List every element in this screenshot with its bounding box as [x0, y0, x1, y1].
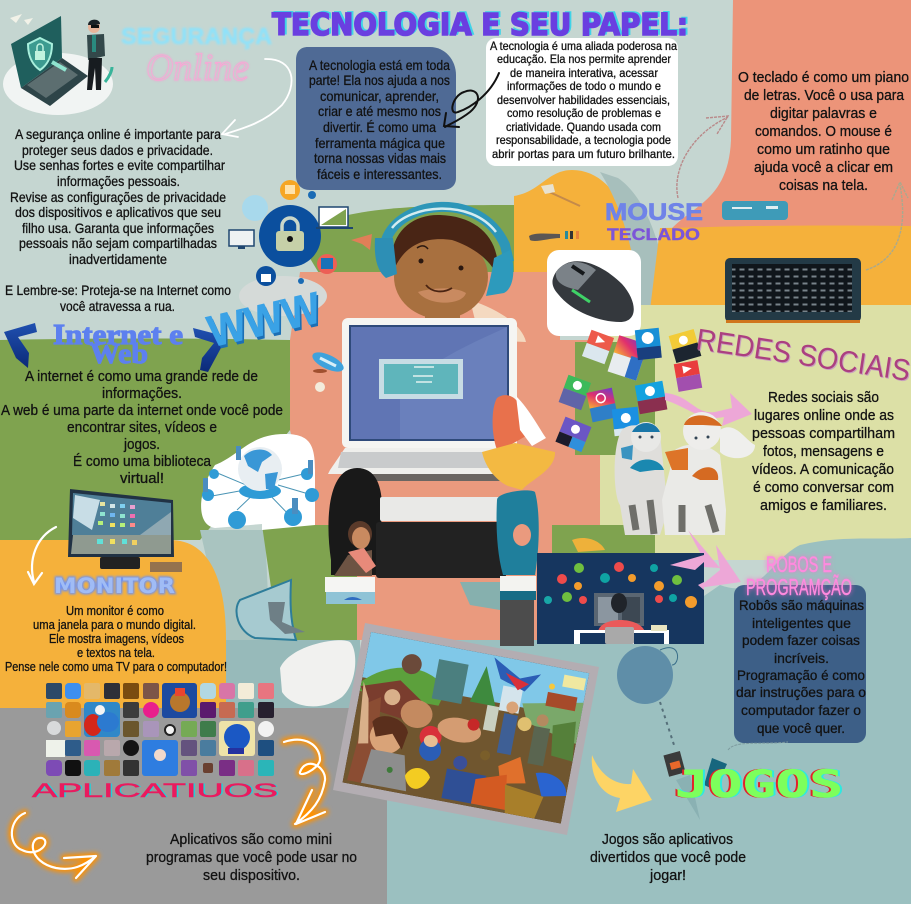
heading: online: Online — [146, 47, 249, 89]
text block: social networks: amigos e familiares. — [760, 497, 887, 514]
heading: robos e programação: ROBOS E — [766, 552, 832, 577]
panel: robots and programming: inteligentes que — [752, 615, 851, 631]
panel: robots and programming: que você quer. — [757, 720, 845, 736]
panel: robots and programming — [734, 585, 866, 743]
panel: technology everywhere: divertir. É como uma — [323, 119, 436, 135]
arrow: grey sketch to keyboard text — [866, 182, 908, 270]
panel: technology everywhere: ferramenta mágica que — [315, 135, 445, 151]
text block: social networks — [752, 389, 895, 514]
text block: monitor: Um monitor é como — [66, 603, 164, 618]
panel: technology everywhere: fáceis e interessantes. — [317, 166, 442, 182]
text block: social networks: Redes sociais são — [768, 389, 879, 406]
text block: keyboard and mouse: como um ratinho que — [757, 141, 890, 158]
panel: technology in education: abrir portas para um futuro brilhante. — [492, 147, 675, 161]
panel: technology in education: informações de todo o mundo e — [507, 79, 661, 93]
panel: technology in education: desenvolver habilidades essenciais, — [497, 93, 670, 107]
text block: apps: seu dispositivo. — [203, 867, 300, 884]
heading: programação — [746, 574, 852, 600]
icon: keyboard — [725, 258, 861, 323]
illustration: hand and teal arm — [460, 395, 605, 646]
panel: technology everywhere: A tecnologia está em toda — [309, 57, 450, 73]
icon: WWW 3D text: WWW — [205, 286, 328, 360]
panel: technology everywhere: torna nossas vidas mais — [314, 150, 446, 166]
text block: internet and web: encontrar sites, vídeos e — [67, 419, 217, 436]
text block: internet and web: virtual! — [120, 470, 164, 487]
text block: internet and web: A internet é como uma grande rede de — [25, 368, 258, 385]
text block: social networks: pessoas compartilham — [752, 425, 895, 442]
illustration: NAO robots — [615, 412, 755, 535]
text block: social networks: fotos, mensagens e — [763, 443, 884, 460]
icon grid: app icons — [46, 683, 274, 776]
panel: technology everywhere — [296, 47, 456, 190]
heading: jogos: JOGOS — [677, 763, 845, 806]
text block: internet and web: jogos. — [123, 436, 160, 453]
text block: keyboard and mouse: digitar palavras e — [770, 105, 877, 122]
text block: security explanation: dos dispositivos e aplicativos que seu — [15, 204, 221, 220]
illustration: programmer with floating tags — [537, 553, 704, 644]
heading: online: Online — [146, 47, 249, 89]
heading: robos e programação — [766, 552, 832, 577]
text block: security explanation: filho usa. Garanta que informações — [22, 220, 214, 236]
text block: social networks: é como conversar com — [753, 479, 894, 496]
text block: apps: Aplicativos são como mini — [170, 831, 332, 848]
heading: internet e web: Web — [90, 338, 148, 370]
text block: apps: programas que você pode usar no — [146, 849, 357, 866]
title: TECNOLOGIA E SEU PAPEL: — [274, 7, 690, 42]
text block: monitor: uma janela para o mundo digital. — [33, 617, 196, 632]
illustration: monitor — [68, 489, 182, 572]
text block: internet and web — [1, 368, 283, 487]
text block: security explanation: inadvertidamente — [69, 251, 167, 267]
arrow: yellow 3D arrow — [592, 755, 652, 812]
panel: robots and programming: Robôs são máquinas — [739, 597, 864, 613]
heading: aplicativos: APLICATIUOS — [32, 781, 278, 802]
panel: technology in education: criatividade. Quando usada com — [506, 120, 661, 134]
text block: keyboard and mouse: coisas na tela. — [779, 177, 868, 194]
illustration: desk with black chair and small figure — [325, 468, 506, 604]
panel: robots and programming: podem fazer coisas — [742, 632, 860, 648]
illustration: globe network — [201, 434, 319, 530]
text block: security explanation: proteger seus dados e privacidade. — [22, 142, 213, 158]
text block: monitor: Ele mostra imagens, vídeos — [49, 631, 184, 646]
props: teal pouch and cords — [617, 646, 788, 820]
text block: internet and web: A web é uma parte da internet onde você pode — [1, 402, 283, 419]
panel: technology in education: A tecnologia é uma aliada poderosa na — [490, 39, 677, 53]
text block: monitor: e textos na tela. — [77, 645, 155, 660]
heading: robos e programação: ROBOS E — [766, 552, 832, 577]
text block: security explanation: informações pessoais. — [57, 173, 180, 189]
panel: technology in education: responsabilidade, a tecnologia pode — [496, 133, 671, 147]
heading: monitor: MONITOR — [54, 574, 175, 598]
arrow: white dashed curve to security text — [222, 59, 292, 137]
heading: internet e web: Internet e — [53, 319, 183, 351]
text block: monitor — [5, 603, 227, 674]
arrow: neon orange right — [284, 740, 325, 824]
text block: keyboard and mouse: comandos. O mouse é — [755, 123, 892, 140]
panel: technology everywhere: comunicar, aprender, — [320, 88, 439, 104]
arrow: pink wavy to social text — [665, 393, 752, 426]
illustration: social media cubes — [555, 328, 702, 452]
panel: technology in education: educação. Ela nos permite aprender — [497, 52, 671, 66]
arrows: pink chevrons — [672, 530, 741, 588]
heading: programação: PROGRAMÇÃO — [746, 574, 852, 600]
heading: jogos — [673, 763, 845, 806]
heading: mouse and teclado: TECLADO — [607, 225, 700, 244]
title: TECNOLOGIA E SEU PAPEL: — [272, 8, 688, 43]
panel: robots and programming: computador fazer o — [741, 702, 861, 718]
arrow: white curved to monitor label — [28, 527, 56, 584]
panel: robots and programming: incríveis. — [774, 650, 829, 666]
illustration: laptop — [328, 318, 517, 481]
heading: aplicativos: APLICATIUOS — [34, 781, 280, 802]
heading: internet e web — [53, 319, 183, 370]
text block: games: Jogos são aplicativos — [602, 831, 733, 848]
icon: small blue mouse — [310, 348, 346, 392]
illustration: online security laptop and guard — [3, 14, 113, 115]
teal bag outline — [236, 580, 305, 640]
panel: robots and programming: dar instruções para o — [736, 684, 866, 700]
arrow: right navy arrow — [193, 328, 224, 372]
panel: technology everywhere: criar e até mesmo nos — [318, 103, 441, 119]
text block: security explanation: pessoais não sejam compartilhadas — [19, 235, 217, 251]
text block: security explanation: E Lembre-se: Proteja-se na Internet como — [5, 282, 231, 298]
icon: WWW 3D text: WWW — [203, 283, 326, 357]
icon: computer mouse card — [547, 250, 641, 336]
heading: programação: PROGRAMÇÃO — [746, 574, 852, 600]
text block: security explanation: Revise as configurações de privacidade — [10, 189, 226, 205]
text block: monitor: Pense nele como uma TV para o computador! — [5, 659, 227, 674]
arrow: left navy arrow — [4, 323, 37, 368]
white cap shape — [280, 640, 355, 706]
props on orange shelf — [529, 184, 788, 241]
text block: security explanation — [5, 126, 231, 314]
illustration: video game collage — [333, 623, 599, 835]
illustration: child with headphones — [351, 207, 526, 342]
heading: monitor: MONITOR — [54, 574, 175, 598]
text block: keyboard and mouse — [738, 69, 909, 194]
heading: jogos: JOGOS — [675, 763, 843, 806]
text block: keyboard and mouse: ajuda você a clicar em — [754, 159, 893, 176]
text block: games: jogar! — [649, 867, 686, 884]
heading: mouse and teclado — [605, 199, 703, 244]
arrow: black scribble — [444, 73, 499, 127]
arrow: pink sketch to top — [677, 116, 728, 198]
text block: social networks: vídeos. A comunicação — [752, 461, 894, 478]
text block: social networks: lugares online onde as — [754, 407, 894, 424]
text block: internet and web: informações. — [102, 385, 182, 402]
arrow: neon orange left — [12, 813, 96, 878]
text block: security explanation: Use senhas fortes e evite compartilhar — [14, 157, 225, 173]
heading: mouse and teclado: MOUSE — [605, 199, 703, 226]
text block: internet and web: É como uma biblioteca — [73, 453, 212, 470]
text block: games: divertidos que você pode — [590, 849, 746, 866]
text block: apps — [146, 831, 357, 884]
panel: technology in education: como resolução de problemas e — [507, 106, 661, 120]
text block: games — [590, 831, 746, 884]
heading: aplicativos — [32, 781, 280, 802]
heading: segurança: SEGURANÇA — [121, 23, 272, 49]
panel: technology in education — [486, 38, 678, 166]
illustration: network with padlock — [229, 180, 353, 316]
panel: technology in education: de maneira interativa, acessar — [510, 66, 658, 80]
text block: security explanation: A segurança online é importante para — [15, 126, 221, 142]
panel: technology everywhere: parte! Ela nos ajuda a nos — [309, 72, 450, 88]
panel: robots and programming: Programação é como — [737, 667, 865, 683]
text block: security explanation: você atravessa a rua. — [60, 298, 175, 314]
heading: jogos: JOGOS — [673, 763, 841, 806]
